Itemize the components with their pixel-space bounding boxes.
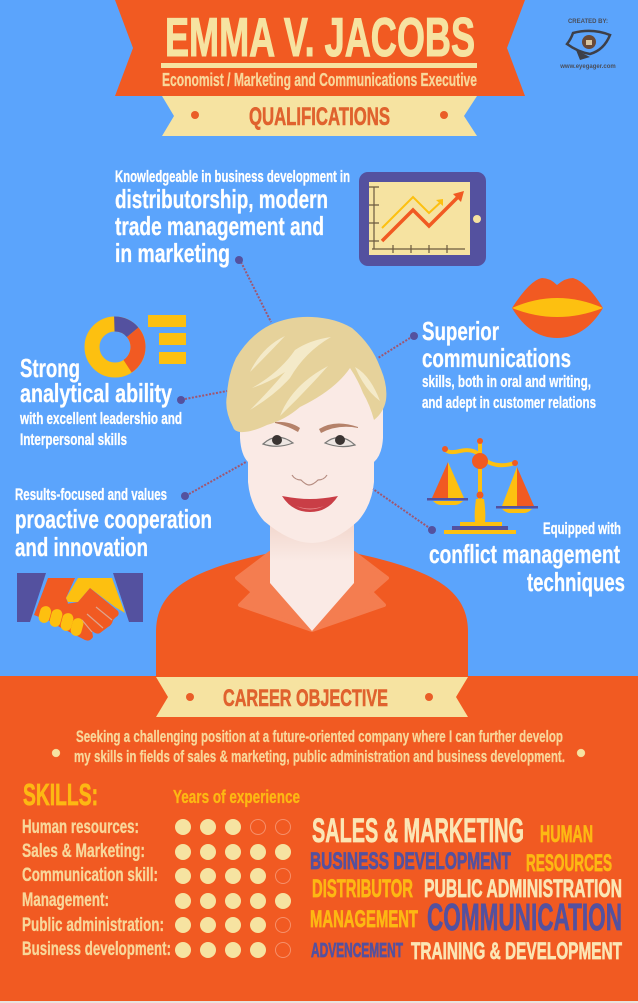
text: analytical ability: Strong [20, 353, 80, 383]
skills heading: SKILLS: [23, 777, 98, 812]
skill labels: Human resources: [22, 817, 139, 838]
person illustration [156, 317, 468, 676]
text: proactive cooperation: proactive cooperation [15, 504, 212, 534]
skill labels [22, 817, 171, 960]
career objective text [52, 727, 585, 766]
text: proactive cooperation: Results-focused and values [15, 486, 167, 504]
skill labels: Sales & Marketing: [22, 841, 145, 862]
connector lines [185, 262, 428, 527]
icon: lips [512, 278, 603, 338]
text: business development: Knowledgeable in business development in [115, 168, 350, 186]
text: proactive cooperation: and innovation [15, 532, 148, 562]
skill rating dots [175, 819, 291, 958]
creator logo: CREATED BY: [568, 19, 608, 25]
text: analytical ability [19, 353, 182, 449]
face [240, 340, 383, 543]
text: proactive cooperation [15, 486, 212, 562]
text: superior communications: Superior [422, 316, 499, 346]
text: analytical ability: with excellent leadershio and [19, 410, 182, 428]
creator logo [559, 19, 616, 70]
hair highlights [250, 336, 380, 416]
text: analytical ability: analytical ability [20, 378, 172, 408]
icon: donut chart [92, 315, 186, 370]
word cloud [310, 812, 622, 965]
eyebrows [275, 422, 358, 433]
career objective ribbon: CAREER OBJECTIVE [223, 685, 388, 712]
text: analytical ability: Interpersonal skills [20, 431, 127, 449]
orange lower panel [0, 676, 638, 1003]
skill labels: Communication skill: [22, 865, 158, 886]
nose [292, 475, 327, 485]
word cloud: HUMAN [540, 821, 593, 848]
header banner [115, 0, 525, 96]
qualifications ribbon [162, 96, 477, 136]
icon: handshake [17, 573, 143, 641]
body [156, 553, 468, 676]
text: business development: trade management and [115, 211, 324, 241]
word cloud: MANAGEMENT [310, 906, 418, 933]
qualifications ribbon: QUALIFICATIONS [249, 103, 390, 131]
creator logo: www.eyegager.com [559, 64, 616, 70]
text: superior communications: communications [422, 343, 571, 373]
text: business development [115, 168, 350, 268]
icon: tablet chart [359, 172, 486, 266]
eyes [263, 437, 355, 447]
skill labels: Business development: [22, 939, 171, 960]
word cloud: BUSINESS DEVELOPMENT [310, 848, 511, 875]
icon: scales [427, 438, 538, 534]
neck [270, 515, 354, 631]
word cloud: DISTRIBUTOR [312, 875, 413, 903]
text: business development: in marketing [115, 238, 230, 268]
skill labels: Management: [22, 890, 109, 911]
text: conflict management [429, 520, 625, 597]
collar [237, 553, 387, 630]
lips [282, 496, 338, 512]
title: EMMA V. JACOBS [165, 6, 475, 68]
text: business development: distributorship, modern [115, 184, 328, 214]
connector dots [177, 256, 436, 534]
career objective ribbon [156, 677, 468, 717]
hair [226, 317, 386, 432]
skill labels: Public administration: [22, 915, 164, 936]
text: superior communications [422, 316, 596, 412]
subtitle: Economist / Marketing and Communications Executive [162, 70, 477, 90]
years of experience heading: Years of experience [173, 786, 300, 807]
word cloud: ADVENCEMENT [311, 940, 403, 962]
